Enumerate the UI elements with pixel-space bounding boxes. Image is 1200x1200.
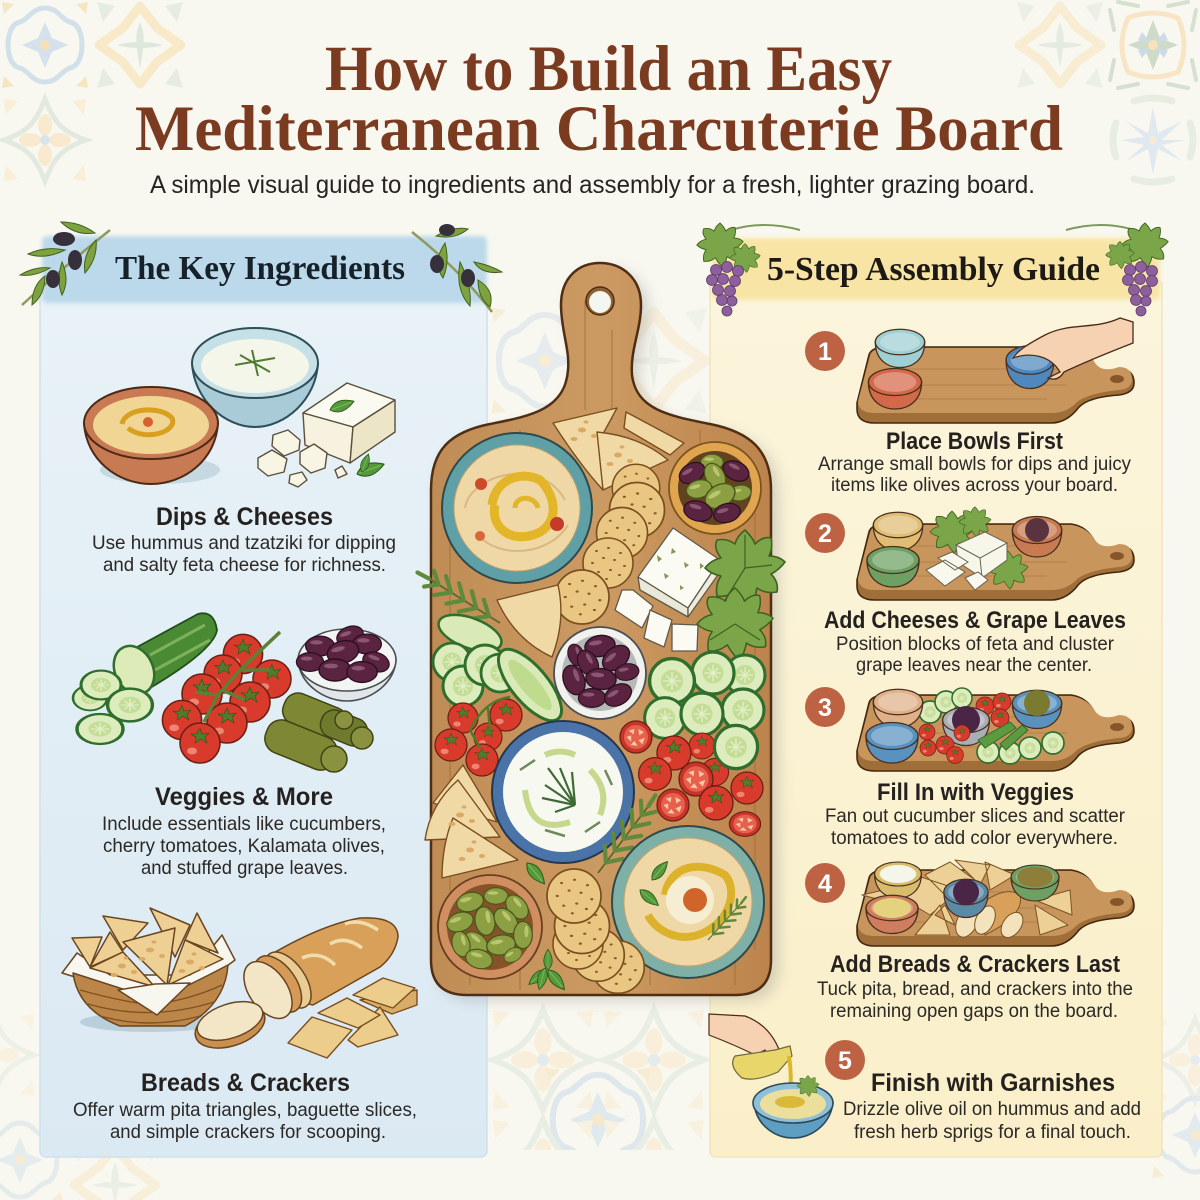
panel header band: [712, 238, 1160, 300]
cherry tomatoes on vine: [162, 632, 291, 763]
tomatoes on the vine left: [435, 697, 522, 776]
step 4 text: remaining open gaps on the board.: [830, 1001, 1118, 1022]
rosemary sprig: [412, 561, 506, 633]
tile pattern: centre column: [491, 307, 707, 414]
step 2 text: Position blocks of feta and cluster: [836, 634, 1115, 655]
cucumber slices: [73, 671, 152, 744]
step 3 text: tomatoes to add color everywhere.: [831, 828, 1118, 849]
title: [135, 33, 1063, 165]
step 1 illustration: bowls on board with hand: [857, 318, 1134, 423]
panel: the key ingredients: [20, 222, 502, 1157]
text: veggies and more: cherry tomatoes, Kalamata olives,: [103, 835, 385, 857]
title: How to Build an Easy: [325, 33, 892, 105]
text: dips and cheeses: and salty feta cheese for richness.: [103, 554, 386, 576]
illustration: breads and crackers: [62, 908, 417, 1058]
step 2 heading: Add Cheeses & Grape Leaves: [824, 607, 1126, 634]
step 5 number badge: 5: [838, 1047, 852, 1075]
feta block and cubes: [258, 383, 395, 487]
text: breads and crackers: and simple crackers for scooping.: [110, 1121, 386, 1143]
step 2 illustration: cheese and leaves on board: [857, 507, 1134, 600]
step 3 number badge: 3: [818, 694, 832, 722]
crackers stack: [547, 869, 644, 993]
illustration: dips and cheeses: [84, 328, 395, 487]
step 1 text: items like olives across your board.: [831, 475, 1118, 496]
text: breads and crackers: Offer warm pita triangles, baguette slices,: [73, 1099, 417, 1121]
basil sprig: [526, 949, 568, 993]
step 5 text: fresh herb sprigs for a final touch.: [854, 1122, 1131, 1143]
step 3 illustration: veggies on board: [857, 688, 1134, 771]
text: veggies and more: and stuffed grape leaves.: [141, 857, 348, 879]
tzatziki bowl: [192, 328, 318, 427]
rosemary sprig lower: [588, 788, 666, 880]
step 3 text: Fan out cucumber slices and scatter: [825, 806, 1126, 827]
whole cucumber: [106, 613, 217, 701]
step 2 text: grape leaves near the center.: [856, 655, 1092, 676]
feta block and cubes: [615, 528, 720, 651]
step 1 text: [818, 454, 1131, 496]
tile pattern: top-left corner: [2, 2, 183, 181]
step 1 heading: Place Bowls First: [886, 428, 1063, 455]
central wooden charcuterie board: [412, 263, 785, 1001]
tile pattern: bottom-right corner: [1152, 1019, 1200, 1178]
tile pattern: centre bottom: [488, 1002, 709, 1150]
step 4 illustration: breads on board: [857, 860, 1134, 946]
crackers: [288, 978, 417, 1058]
step 5 illustration: olive oil drizzle: [709, 1014, 833, 1138]
hummus bowl: [84, 387, 220, 484]
baguette and slices: [190, 918, 398, 1056]
step 5 text: [843, 1099, 1141, 1143]
step 4 number badge: [805, 863, 845, 903]
step 3 text: [825, 806, 1126, 849]
step 2 text: [836, 634, 1115, 676]
step 4 text: [817, 979, 1133, 1022]
panel heading: The Key Ingredients: [115, 250, 405, 287]
kalamata olive bowl: [296, 623, 396, 701]
icon: olive branch right: [412, 224, 502, 312]
heading: breads and crackers: Breads & Crackers: [141, 1069, 350, 1097]
step 4 text: Tuck pita, bread, and crackers into the: [817, 979, 1133, 1000]
step 4 heading: Add Breads & Crackers Last: [830, 951, 1120, 978]
cucumber slices right: [645, 652, 765, 738]
step 1 number badge: 1: [818, 338, 832, 366]
grape leaves: [697, 530, 785, 660]
step 3 heading: Fill In with Veggies: [877, 779, 1074, 806]
cucumber slices left: [433, 608, 572, 730]
cut and whole tomatoes right: [620, 721, 763, 836]
lower-left pita wedges: [425, 765, 518, 878]
panel: 5-step assembly guide: [697, 223, 1168, 1157]
text: veggies and more: [102, 813, 386, 879]
text: breads and crackers: [73, 1099, 417, 1143]
tzatziki bowl: [492, 721, 634, 863]
hummus bowl with olive oil swirl: [442, 433, 592, 583]
step 5 text: Drizzle olive oil on hummus and add: [843, 1099, 1141, 1120]
basil leaf: [523, 859, 549, 887]
pita basket: [62, 908, 235, 1032]
text: veggies and more: Include essentials like cucumbers,: [102, 813, 386, 835]
tile pattern: bottom-left corner: [0, 1014, 158, 1200]
icon: olive branch left: [20, 222, 110, 305]
step 5 number badge: [825, 1040, 865, 1080]
heading: veggies and more: Veggies & More: [155, 783, 333, 811]
pita wedge: [497, 585, 561, 657]
illustration: veggies and more: [73, 613, 396, 775]
icon: grape vine left: [697, 223, 800, 316]
tile pattern: top-right corner: [1017, 2, 1196, 182]
top pita triangles: [553, 408, 684, 490]
step 1 text: Arrange small bowls for dips and juicy: [818, 454, 1131, 475]
stuffed grape leaves: [260, 689, 373, 775]
step 2 number badge: 2: [818, 520, 832, 548]
text: dips and cheeses: Use hummus and tzatziki for dipping: [92, 532, 396, 554]
green olive bowl: [438, 875, 542, 979]
heading: dips and cheeses: Dips & Cheeses: [156, 503, 333, 531]
hummus bowl lower right: [612, 826, 764, 978]
kalamata olive bowl: [554, 627, 646, 719]
panel heading: 5-Step Assembly Guide: [767, 251, 1100, 288]
title: Mediterranean Charcuterie Board: [135, 93, 1063, 165]
panel header band: [42, 236, 487, 303]
step 5 heading: Finish with Garnishes: [871, 1069, 1115, 1097]
step 3 number badge: [805, 687, 845, 727]
step 4 number badge: 4: [818, 870, 832, 898]
crackers column: [555, 464, 664, 624]
step 1 number badge: [805, 331, 845, 371]
text: dips and cheeses: [92, 532, 396, 576]
subtitle: A simple visual guide to ingredients and assembly for a fresh, lighter grazing board.: [150, 171, 1035, 199]
icon: grape vine right: [1066, 223, 1168, 316]
small olive bowl: [669, 442, 761, 534]
step 2 number badge: [805, 513, 845, 553]
